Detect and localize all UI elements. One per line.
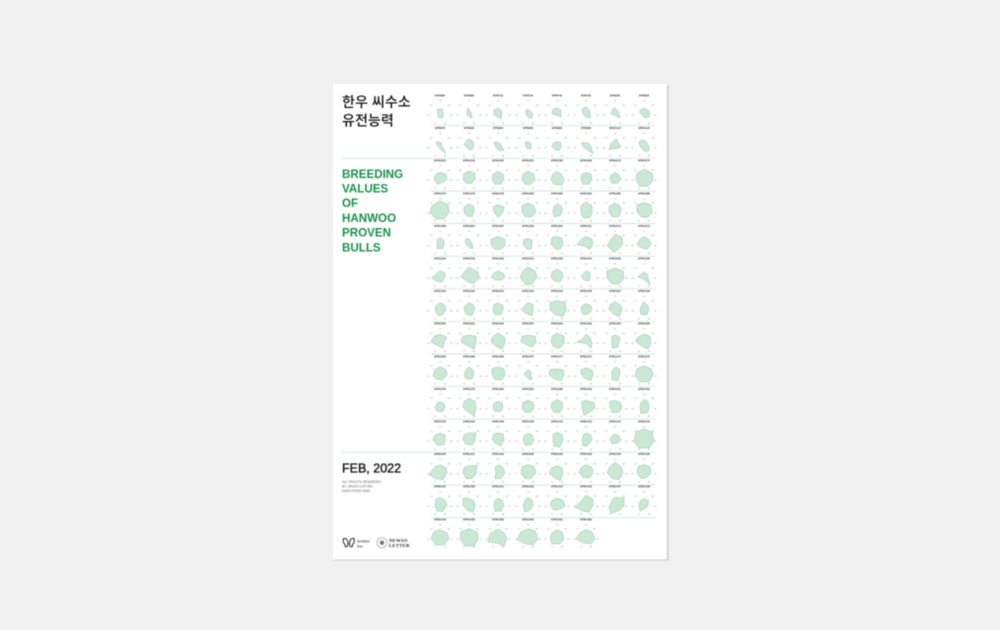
date: FEB, 2022 xyxy=(342,462,401,476)
radar: KPN1374 xyxy=(609,354,621,358)
radar: KPN980 xyxy=(581,126,592,130)
radar: KPN1459 xyxy=(492,517,504,521)
radar xyxy=(456,517,481,549)
radar xyxy=(573,387,598,418)
radar xyxy=(427,94,452,125)
radar xyxy=(485,322,510,353)
radar xyxy=(631,322,656,353)
radar: KPN1449 xyxy=(434,517,446,521)
radar: KPN1320 xyxy=(492,256,504,260)
credits text: DATA FROM NIAS xyxy=(342,489,371,493)
radar xyxy=(515,126,540,157)
radar xyxy=(602,485,627,516)
radar xyxy=(515,354,540,386)
radar: KPN1240 xyxy=(463,159,475,163)
radar xyxy=(427,420,452,451)
radar: KPN1415 xyxy=(609,420,621,424)
poster sheet xyxy=(333,84,668,560)
radar xyxy=(544,94,569,125)
radar: KPN1447 xyxy=(609,485,621,489)
radar xyxy=(573,159,598,190)
radar xyxy=(602,126,627,157)
radar xyxy=(427,224,452,255)
logo: Artiller Inc.: Artiller xyxy=(357,538,370,544)
radar xyxy=(485,420,510,451)
radar: KPN1380 xyxy=(492,387,504,391)
radar xyxy=(602,322,627,353)
radar xyxy=(573,354,598,386)
radar xyxy=(456,452,481,483)
radar xyxy=(602,452,627,483)
radar: KPN904 xyxy=(493,126,504,130)
radar: KPN1438 xyxy=(463,485,475,489)
radar xyxy=(456,94,481,125)
radar xyxy=(427,191,452,223)
radar: KPN1358 xyxy=(580,322,592,326)
radar: KPN1378 xyxy=(463,387,475,391)
radar: KPN1436 xyxy=(638,452,650,456)
radar: KPN1403 xyxy=(434,420,446,424)
radar xyxy=(573,517,598,549)
radar xyxy=(427,387,452,418)
radar chart grid xyxy=(427,94,656,549)
radar xyxy=(544,159,569,190)
heading: English: PROVEN xyxy=(342,227,391,240)
radar xyxy=(544,485,569,516)
radar: KPN1483 xyxy=(580,517,592,521)
radar xyxy=(631,159,656,190)
radar: KPN1353 xyxy=(492,322,504,326)
radar xyxy=(456,159,481,190)
radar: KPN1460 xyxy=(522,517,534,521)
radar: KPN830 xyxy=(610,94,621,98)
radar xyxy=(573,452,598,483)
radar: KPN1375 xyxy=(638,354,650,358)
radar xyxy=(602,94,627,125)
radar: KPN1425 xyxy=(551,452,563,456)
radar: KPN1318 xyxy=(463,256,475,260)
radar: KPN1314 xyxy=(609,224,621,228)
credits text: BY. WHATLLER INC. xyxy=(342,485,374,489)
radar xyxy=(631,191,656,223)
radar: KPN1420 xyxy=(434,452,446,456)
radar: KPN1270 xyxy=(609,159,621,163)
radar: KPN726 xyxy=(523,94,534,98)
radar: KPN1381 xyxy=(522,387,534,391)
radar: KPN1275 xyxy=(638,159,650,163)
radar xyxy=(456,289,481,320)
radar xyxy=(427,322,452,353)
radar xyxy=(631,289,656,320)
radar: KPN1299 xyxy=(522,224,534,228)
radar xyxy=(485,191,510,223)
radar: KPN1279 xyxy=(492,191,504,195)
radar xyxy=(573,256,598,288)
radar xyxy=(544,452,569,483)
radar xyxy=(631,387,656,418)
radar: KPN1437 xyxy=(434,485,446,489)
radar xyxy=(485,387,510,418)
radar: KPN1355 xyxy=(551,322,563,326)
radar: KPN1260 xyxy=(551,159,563,163)
radar xyxy=(602,224,627,255)
radar: KPN1354 xyxy=(522,322,534,326)
radar xyxy=(573,485,598,516)
radar xyxy=(427,452,452,483)
radar: KPN1284 xyxy=(580,191,592,195)
radar: KPN1220 xyxy=(434,159,446,163)
radar xyxy=(602,289,627,320)
radar: KPN1110 xyxy=(609,126,621,130)
radar xyxy=(544,420,569,451)
radar: KPN1285 xyxy=(609,191,621,195)
title: Korean: 한우 씨수소 xyxy=(342,94,411,110)
radar: KPN1371 xyxy=(551,354,563,358)
radar: KPN1369 xyxy=(492,354,504,358)
logo: Newsoletter: NEWSO xyxy=(389,538,408,543)
radar xyxy=(631,224,656,255)
radar: KPN1434 xyxy=(609,452,621,456)
radar xyxy=(602,354,627,386)
radar: KPN1347 xyxy=(609,289,621,293)
radar xyxy=(485,354,510,386)
radar xyxy=(544,387,569,418)
logo: Newsoletter: LETTER xyxy=(389,543,410,548)
radar: KPN1442 xyxy=(522,485,534,489)
radar xyxy=(544,322,569,353)
radar xyxy=(631,485,656,516)
radar: KPN1288 xyxy=(434,224,446,228)
radar xyxy=(544,354,569,386)
radar: KPN1297 xyxy=(492,224,504,228)
radar xyxy=(631,420,656,451)
radar: KPN1441 xyxy=(492,485,504,489)
radar: KPN1430 xyxy=(580,452,592,456)
radar: KPN1404 xyxy=(463,420,475,424)
radar xyxy=(602,387,627,418)
radar: KPN1300 xyxy=(551,224,563,228)
radar xyxy=(573,322,598,353)
radar xyxy=(456,387,481,418)
radar: KPN1458 xyxy=(463,517,475,521)
radar xyxy=(573,126,598,157)
radar xyxy=(515,289,540,320)
radar xyxy=(544,126,569,157)
radar xyxy=(515,191,540,223)
radar: KPN752 xyxy=(581,94,592,98)
radar: KPN1346 xyxy=(551,289,563,293)
logo: Newsoletter xyxy=(377,538,410,548)
radar: KPN1461 xyxy=(551,517,563,521)
radar: KPN1348 xyxy=(580,289,592,293)
radar: KPN1376 xyxy=(434,387,446,391)
radar xyxy=(427,256,452,288)
radar xyxy=(515,224,540,255)
radar xyxy=(485,94,510,125)
radar: KPN1368 xyxy=(463,354,475,358)
radar: KPN1359 xyxy=(609,322,621,326)
heading: English: OF xyxy=(342,197,358,210)
radar: KPN1370 xyxy=(522,354,534,358)
radar xyxy=(602,420,627,451)
radar xyxy=(573,224,598,255)
radar: KPN1410 xyxy=(551,420,563,424)
radar xyxy=(515,94,540,125)
radar xyxy=(456,256,481,288)
radar: KPN1315 xyxy=(638,224,650,228)
radar xyxy=(456,126,481,157)
radar: KPN1251 xyxy=(522,159,534,163)
radar: KPN880 xyxy=(435,94,446,98)
radar xyxy=(515,517,540,549)
radar xyxy=(515,485,540,516)
heading: English: BULLS xyxy=(342,241,381,254)
radar xyxy=(515,452,540,483)
radar: KPN1444 xyxy=(551,485,563,489)
heading: English: HANWOO xyxy=(342,212,396,225)
radar: KPN1352 xyxy=(463,322,475,326)
radar: KPN716 xyxy=(493,94,504,98)
radar xyxy=(544,517,569,549)
radar: KPN1330 xyxy=(551,256,563,260)
radar: KPN1280 xyxy=(522,191,534,195)
radar: KPN1344 xyxy=(492,289,504,293)
credits text: ALL RIGHTS RESERVED xyxy=(342,480,382,484)
radar xyxy=(631,452,656,483)
radar: KPN1282 xyxy=(551,191,563,195)
radar xyxy=(602,256,627,288)
radar xyxy=(456,354,481,386)
radar xyxy=(485,224,510,255)
radar: KPN876 xyxy=(435,126,446,130)
radar xyxy=(631,354,656,386)
radar xyxy=(631,256,656,288)
radar: KPN1349 xyxy=(638,289,650,293)
radar: KPN1286 xyxy=(638,191,650,195)
radar xyxy=(427,354,452,386)
radar xyxy=(544,191,569,223)
radar: KPN1373 xyxy=(580,354,592,358)
radar xyxy=(456,485,481,516)
radar xyxy=(544,256,569,288)
radar: KPN1336 xyxy=(609,256,621,260)
radar: KPN1365 xyxy=(434,354,446,358)
radar: KPN1116 xyxy=(638,126,650,130)
radar: KPN1311 xyxy=(580,224,592,228)
radar xyxy=(631,94,656,125)
radar: KPN1422 xyxy=(492,452,504,456)
radar: KPN1334 xyxy=(580,256,592,260)
radar: KPN1316 xyxy=(434,256,446,260)
radar xyxy=(456,322,481,353)
radar: KPN858 xyxy=(639,94,650,98)
radar xyxy=(485,289,510,320)
radar xyxy=(485,256,510,288)
radar xyxy=(515,159,540,190)
radar xyxy=(485,485,510,516)
radar: KPN1278 xyxy=(463,191,475,195)
radar xyxy=(602,159,627,190)
heading: English: BREEDING xyxy=(342,168,403,181)
radar: KPN1402 xyxy=(638,387,650,391)
radar: KPN1409 xyxy=(522,420,534,424)
radar: KPN1276 xyxy=(434,191,446,195)
radar xyxy=(515,387,540,418)
radar xyxy=(544,289,569,320)
radar: KPN890 xyxy=(464,94,475,98)
radar xyxy=(456,420,481,451)
radar: KPN1250 xyxy=(492,159,504,163)
radar xyxy=(515,420,540,451)
radar: KPN1342 xyxy=(463,289,475,293)
radar: KPN1266 xyxy=(580,159,592,163)
radar xyxy=(427,126,452,157)
radar xyxy=(485,452,510,483)
radar: KPN1340 xyxy=(434,289,446,293)
radar xyxy=(573,420,598,451)
radar: KPN1446 xyxy=(580,485,592,489)
radar xyxy=(515,256,540,288)
radar xyxy=(631,126,656,157)
radar xyxy=(515,322,540,353)
radar xyxy=(485,517,510,549)
logo: Artiller Inc.: Inc. xyxy=(357,544,364,548)
radar: KPN960 xyxy=(552,126,563,130)
radar: KPN1294 xyxy=(463,224,475,228)
radar: KPN1345 xyxy=(522,289,534,293)
radar: KPN1423 xyxy=(522,452,534,456)
radar xyxy=(485,159,510,190)
logo: Artiller Inc. xyxy=(343,538,370,548)
radar: KPN1416 xyxy=(638,420,650,424)
radar xyxy=(456,224,481,255)
radar xyxy=(544,224,569,255)
radar: KPN1408 xyxy=(492,420,504,424)
title: Korean: 유전능력 xyxy=(342,112,394,128)
radar xyxy=(427,159,452,190)
radar xyxy=(573,289,598,320)
radar: KPN1421 xyxy=(463,452,475,456)
radar xyxy=(427,485,452,516)
radar xyxy=(573,191,598,223)
radar xyxy=(427,289,452,320)
radar: KPN1448 xyxy=(638,485,650,489)
heading: English: VALUES xyxy=(342,182,388,196)
radar: KPN1360 xyxy=(638,322,650,326)
radar: KPN1350 xyxy=(434,322,446,326)
radar: KPN742 xyxy=(552,94,563,98)
radar: KPN1413 xyxy=(580,420,592,424)
radar xyxy=(427,517,452,549)
radar xyxy=(573,94,598,125)
radar: KPN1400 xyxy=(580,387,592,391)
radar: KPN1382 xyxy=(551,387,563,391)
radar xyxy=(485,126,510,157)
radar: KPN900 xyxy=(464,126,475,130)
radar: KPN950 xyxy=(523,126,534,130)
radar: KPN1339 xyxy=(638,256,650,260)
radar: KPN1321 xyxy=(522,256,534,260)
radar xyxy=(456,191,481,223)
radar xyxy=(602,191,627,223)
radar: KPN1401 xyxy=(609,387,621,391)
